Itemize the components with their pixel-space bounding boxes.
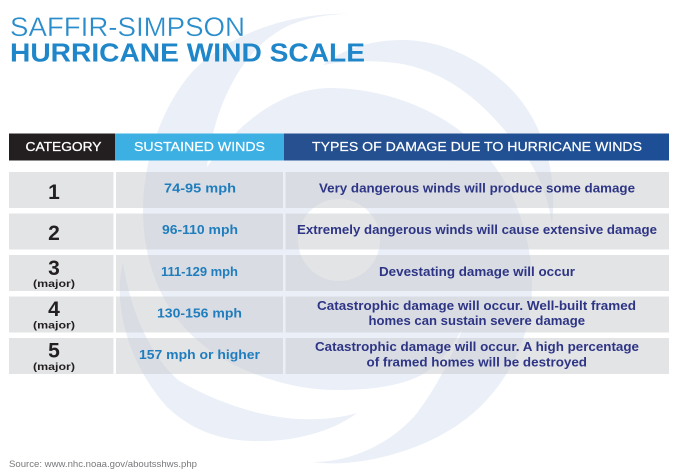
background hurricane swirl icon bbox=[120, 14, 553, 463]
row 1 bbox=[9, 172, 669, 208]
row 5 bbox=[9, 338, 669, 374]
row 3: (major) bbox=[33, 278, 75, 290]
row 4: homes can sustain severe damage bbox=[368, 313, 585, 328]
row 3 bbox=[9, 255, 669, 291]
row 3: Devestating damage will occur bbox=[379, 264, 575, 279]
header: category: CATEGORY bbox=[26, 139, 102, 154]
title bbox=[10, 12, 365, 68]
row 2: 2 bbox=[48, 222, 60, 245]
row 5: of framed homes will be destroyed bbox=[366, 354, 587, 370]
source note: Source: www.nhc.noaa.gov/aboutsshws.php bbox=[9, 459, 197, 470]
row 4: Catastrophic damage will occur. Well-built framed bbox=[317, 298, 636, 313]
header: types of damage: TYPES OF DAMAGE DUE TO HURRICANE WINDS bbox=[312, 139, 642, 154]
header: types of damage bbox=[284, 134, 669, 160]
title: HURRICANE WIND SCALE bbox=[10, 40, 365, 68]
row 5: 5 bbox=[48, 340, 60, 362]
row 5: (major) bbox=[33, 361, 75, 373]
row 4: (major) bbox=[33, 320, 75, 332]
table rows bbox=[9, 172, 669, 374]
row 1: Very dangerous winds will produce some damage bbox=[319, 180, 635, 196]
row 1: 1 bbox=[48, 181, 60, 204]
row 4: 4 bbox=[48, 298, 60, 321]
row 2 bbox=[9, 214, 669, 250]
row 3: 3 bbox=[48, 257, 60, 280]
table header bbox=[9, 134, 669, 160]
row 2: Extremely dangerous winds will cause extensive damage bbox=[297, 222, 657, 237]
row 5: 157 mph or higher bbox=[139, 347, 260, 362]
header: sustained winds: SUSTAINED WINDS bbox=[134, 139, 265, 154]
header: sustained winds bbox=[115, 134, 284, 160]
header: category bbox=[9, 134, 115, 160]
title: SAFFIR-SIMPSON bbox=[10, 12, 245, 42]
row 5: Catastrophic damage will occur. A high percentage bbox=[315, 339, 639, 354]
row 3: 111-129 mph bbox=[161, 264, 238, 279]
row 2: 96-110 mph bbox=[162, 222, 238, 237]
row 1: 74-95 mph bbox=[164, 180, 236, 196]
row 4 bbox=[9, 296, 669, 332]
row 4: 130-156 mph bbox=[157, 306, 242, 320]
